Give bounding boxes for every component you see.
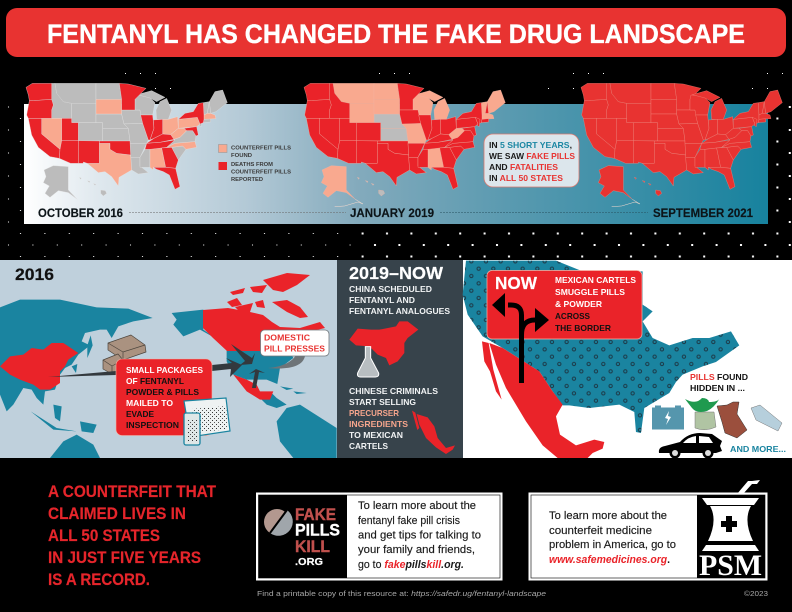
arrow: China to North America: [48, 344, 265, 388]
logo: PSM mortar and pestle: [699, 480, 762, 582]
text: learn more fentanyl: and get tips for talking to: [358, 530, 481, 542]
sign: now: & POWDER: [555, 299, 602, 309]
title banner: [6, 8, 786, 57]
text: learn more fentanyl: go to fakepillskill.org.: [358, 559, 464, 571]
text: China scheduled: [349, 284, 450, 316]
text: learn more safe medicines: problem in America, go to: [549, 539, 676, 551]
icon: car: [659, 433, 722, 458]
icon: pill bag and bottle: [184, 398, 230, 445]
text: learn more fentanyl: your family and friends,: [358, 544, 475, 556]
title banner: FENTANYL HAS CHANGED THE FAKE DRUG LANDSCAPE: [47, 19, 745, 49]
text: learn more fentanyl: To learn more about the: [358, 500, 476, 512]
text: China scheduled: FENTANYL ANALOGUES: [349, 306, 450, 316]
highlighted countries: China and Mexico: [0, 343, 273, 400]
timeline labels: JANUARY 2019: [350, 206, 434, 220]
icon: tube: [751, 405, 782, 431]
sign: now: MEXICAN CARTELS: [555, 275, 636, 285]
legend: [218, 144, 291, 183]
map: US and Mexico: [463, 261, 739, 458]
arrow: fork: [508, 305, 540, 383]
callout: small packages: INSPECTION: [126, 420, 179, 430]
heading: 2016: 2016: [15, 265, 54, 284]
legend: FOUND: [231, 153, 252, 159]
callout: small packages: [116, 359, 212, 436]
icon: battery: [652, 406, 684, 430]
logo: fake pills kill: [264, 506, 340, 568]
legend: REPORTED: [231, 177, 263, 183]
text: Chinese criminals: TO MEXICAN: [349, 430, 403, 440]
callout: domestic pill presses: PILL PRESSES: [264, 344, 325, 354]
sign: now: [487, 270, 642, 383]
logo: fake pills kill: FAKE: [295, 506, 336, 524]
callout: 5 short years: IN ALL 50 STATES: [489, 173, 563, 183]
callout: small packages: POWDER & PILLS: [126, 387, 199, 397]
callout: domestic pill presses: [260, 330, 329, 356]
text: learn more safe medicines: counterfeit medicine: [549, 525, 652, 537]
callout: small packages: MAILED TO: [126, 398, 174, 408]
world map: [0, 300, 337, 458]
text: record statement: A COUNTERFEIT THAT: [48, 483, 216, 501]
callout: domestic pill presses: DOMESTIC: [264, 332, 310, 342]
footer text: Find a printable copy of this resource at: https://safedr.ug/fentanyl-landscape: [257, 589, 546, 598]
sign: now: NOW: [495, 273, 537, 293]
callout: small packages: EVADE: [126, 409, 154, 419]
heading: 2019-now: 2019–NOW: [349, 263, 443, 283]
text: Chinese criminals: [349, 386, 438, 451]
callout: 5 short years: IN 5 SHORT YEARS ,: [489, 140, 572, 150]
legend: DEATHS FROM: [231, 162, 273, 168]
legend: COUNTERFEIT PILLS: [231, 170, 291, 176]
sign: now: SMUGGLE PILLS: [555, 287, 625, 297]
text: record statement: CLAIMED LIVES IN: [48, 505, 186, 523]
panel: fakepillskill box: [257, 494, 502, 580]
logo: PSM mortar and pestle: PSM: [699, 549, 762, 582]
panel: state map timeline: [24, 83, 782, 224]
text: learn more safe medicines: To learn more about the: [549, 510, 667, 522]
text: record statement: [48, 483, 216, 589]
map: September 2021: [581, 83, 782, 207]
text: learn more safe medicines: [549, 510, 676, 566]
text: Chinese criminals: INGREDIENTS: [349, 419, 408, 429]
callout: 5 short years: WE SAW FAKE PILLS: [489, 151, 575, 161]
footer text: [257, 589, 768, 598]
text: record statement: ALL 50 STATES: [48, 527, 160, 545]
text: China scheduled: FENTANYL AND: [349, 295, 415, 305]
panel: 2016 world map: [0, 260, 337, 458]
footer text: ©2023: [744, 589, 768, 598]
text: Chinese criminals: CARTELS: [349, 441, 388, 451]
text: Chinese criminals: PRECURSER: [349, 408, 399, 418]
timeline labels: SEPTEMBER 2021: [653, 206, 753, 220]
icon: brown corset: [717, 402, 747, 438]
panel: safe medicines box: [530, 480, 766, 582]
callout: small packages: OF FENTANYL: [126, 376, 184, 386]
callout: 5 short years: AND FATALITIES: [489, 162, 558, 172]
timeline labels: OCTOBER 2016: [38, 206, 123, 220]
sign: now: ACROSS: [555, 311, 590, 321]
text: pills found hidden: HIDDEN IN ...: [690, 383, 745, 393]
panel: now map: [463, 260, 792, 458]
text: and more: AND MORE...: [730, 444, 786, 454]
text: Chinese criminals: START SELLING: [349, 397, 416, 407]
text: China scheduled: CHINA SCHEDULED: [349, 284, 432, 294]
text: Chinese criminals: CHINESE CRIMINALS: [349, 386, 438, 396]
legend: COUNTERFEIT PILLS: [231, 146, 291, 152]
text: learn more fentanyl: [358, 500, 481, 571]
logo: fake pills kill: .ORG: [295, 557, 323, 568]
arrow: domestic presses: [268, 355, 305, 368]
text: learn more fentanyl: fentanyl fake pill crisis: [358, 515, 460, 527]
text: record statement: IN JUST FIVE YEARS: [48, 549, 201, 567]
logo: fake pills kill: PILLS: [295, 522, 340, 540]
map: October 2016: [26, 83, 227, 199]
icon: China with flask: [349, 321, 418, 377]
map: Canada: [203, 273, 325, 351]
text: record statement: IS A RECORD.: [48, 571, 150, 589]
timeline labels: [38, 206, 753, 220]
callout: 5 short years: [484, 134, 579, 187]
sign: now: THE BORDER: [555, 323, 611, 333]
text: pills found hidden: [690, 372, 748, 393]
icon: Mexico: [412, 411, 455, 454]
map: January 2019: [304, 83, 505, 207]
callout: small packages: SMALL PACKAGES: [126, 365, 203, 375]
panel: 2019-now: [337, 260, 463, 458]
icon: shipping boxes: [103, 335, 146, 374]
icon: toy figure: [685, 398, 720, 430]
text: pills found hidden: PILLS FOUND: [690, 372, 748, 382]
logo: fake pills kill: KILL: [295, 538, 330, 556]
text: learn more safe medicines: www.safemedicines.org.: [549, 554, 670, 566]
